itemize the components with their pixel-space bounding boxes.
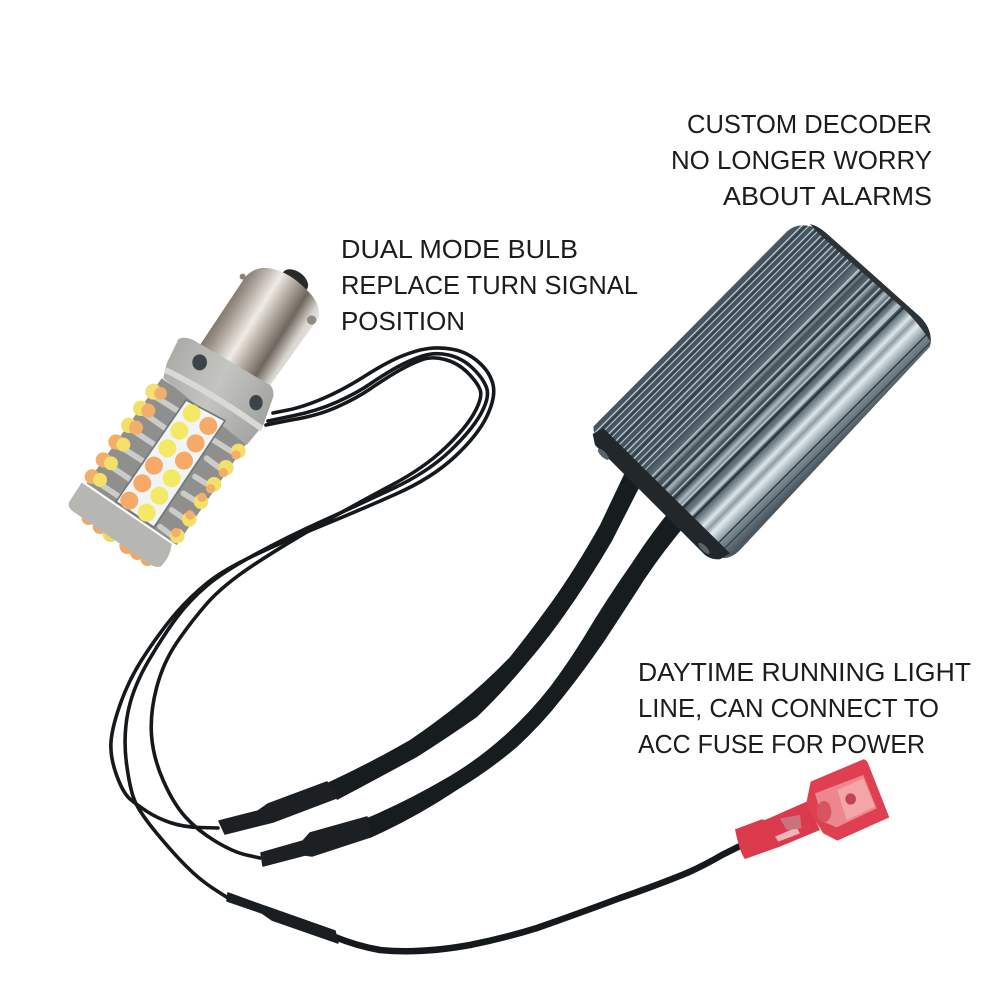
metal base bbox=[197, 268, 319, 390]
text: bulb label: POSITION bbox=[341, 306, 465, 336]
text: bulb label: DUAL MODE BULB bbox=[341, 234, 578, 264]
heat sink fins bbox=[92, 393, 232, 537]
base pins bbox=[240, 274, 316, 325]
text: daytime running light label bbox=[638, 657, 971, 759]
text: decoder label: ABOUT ALARMS bbox=[723, 181, 932, 211]
thick black cables from decoder bbox=[219, 466, 688, 866]
decoder box bbox=[592, 224, 931, 560]
lower cable heat-shrink tube bbox=[261, 817, 370, 866]
side LEDs right bbox=[170, 444, 246, 543]
text: decoder label: CUSTOM DECODER bbox=[687, 109, 932, 139]
bottom collar bbox=[69, 483, 172, 567]
text: bulb label bbox=[341, 234, 638, 336]
text: daytime running light label: DAYTIME RUNNING LIGHT bbox=[638, 657, 971, 687]
red spade connector bbox=[735, 759, 889, 859]
thin wires from bulb bbox=[111, 348, 494, 898]
bottom orange LEDs bbox=[82, 512, 154, 566]
text: daytime running light label: ACC FUSE FOR POWER bbox=[638, 729, 925, 759]
collar holes bbox=[192, 354, 207, 370]
lower cable bbox=[367, 508, 688, 838]
text: decoder label: NO LONGER WORRY bbox=[671, 145, 932, 175]
text: decoder label bbox=[671, 109, 932, 211]
ribbed aluminium housing bbox=[593, 225, 931, 558]
upper cable heat-shrink tube bbox=[219, 782, 339, 834]
LED panel bbox=[116, 400, 225, 527]
black end cap bbox=[593, 428, 730, 559]
bulb bbox=[69, 265, 319, 567]
wire to red connector with heat-shrink joint bbox=[227, 846, 740, 951]
text: daytime running light label: LINE, CAN CONNECT TO bbox=[638, 693, 939, 723]
base contact bbox=[278, 265, 312, 297]
text: bulb label: REPLACE TURN SIGNAL bbox=[341, 270, 638, 300]
grey body bbox=[87, 378, 250, 545]
upper cable bbox=[327, 466, 644, 800]
side LEDs left bbox=[85, 384, 167, 487]
top collar bbox=[163, 338, 273, 445]
top dark edge bbox=[810, 224, 931, 342]
